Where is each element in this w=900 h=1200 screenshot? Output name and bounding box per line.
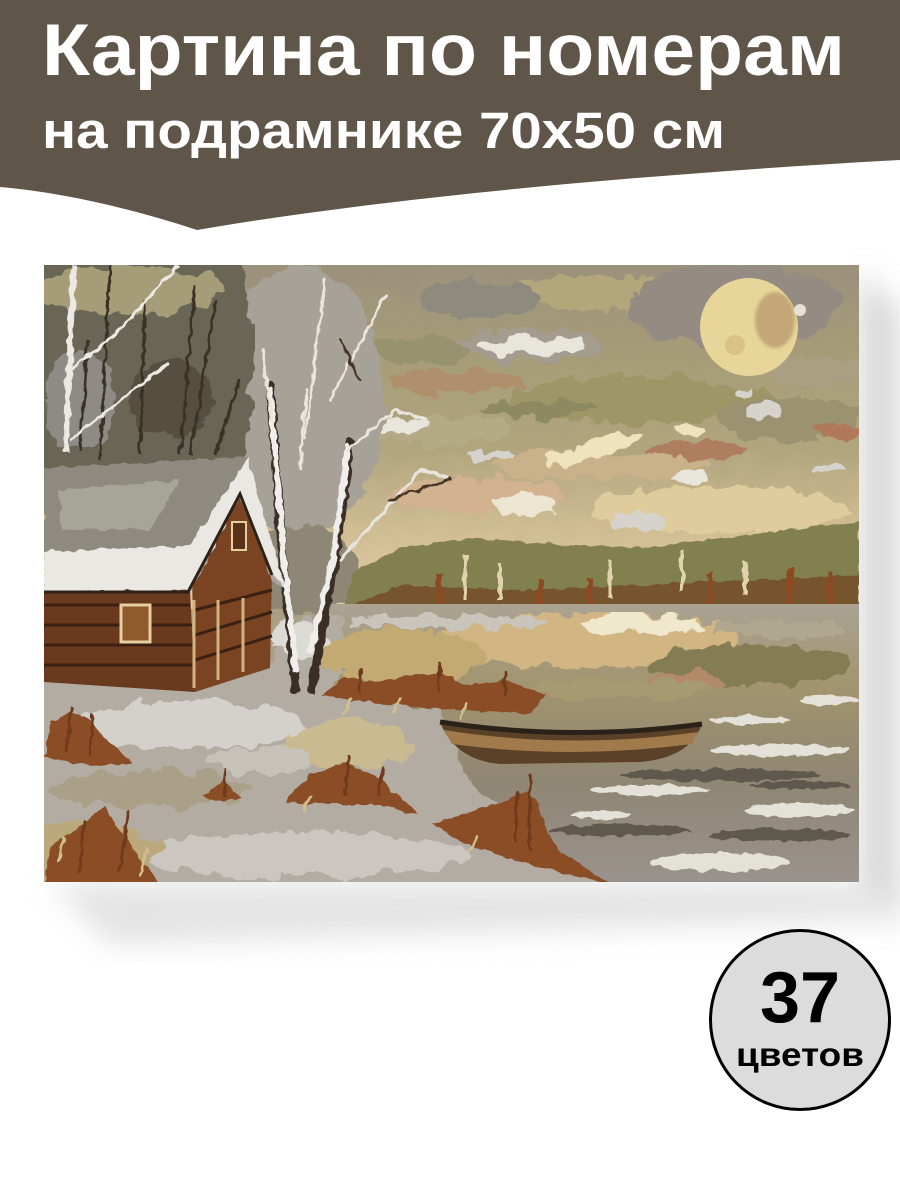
log cabin: [44, 457, 285, 692]
birch trees: [262, 280, 450, 690]
title: Картина по номерам: [42, 10, 845, 91]
background mauve haze behind trees: [244, 265, 389, 530]
painting: winter cabin by the lake: [44, 265, 859, 882]
badge: 37 colours: [710, 930, 890, 1110]
header banner: [0, 0, 900, 230]
cabin walls: [44, 585, 195, 692]
subtitle: на подрамнике 70х50 см: [42, 102, 725, 159]
rowing boat: [440, 722, 702, 764]
cabin window: [121, 605, 150, 642]
far treeline: [345, 522, 859, 610]
badge number: 37: [760, 958, 840, 1038]
background forest at top left: [44, 265, 255, 476]
lake: [320, 604, 860, 882]
sky: [20, 250, 880, 615]
moon: [700, 278, 806, 376]
badge label: цветов: [736, 1036, 864, 1073]
snowy roof: [44, 457, 285, 592]
canvas shadow: [50, 270, 900, 945]
clouds: [370, 263, 864, 534]
reeds and dry grass: [44, 664, 610, 884]
snowy ground: [44, 615, 596, 882]
painting base: [191, 608, 318, 664]
